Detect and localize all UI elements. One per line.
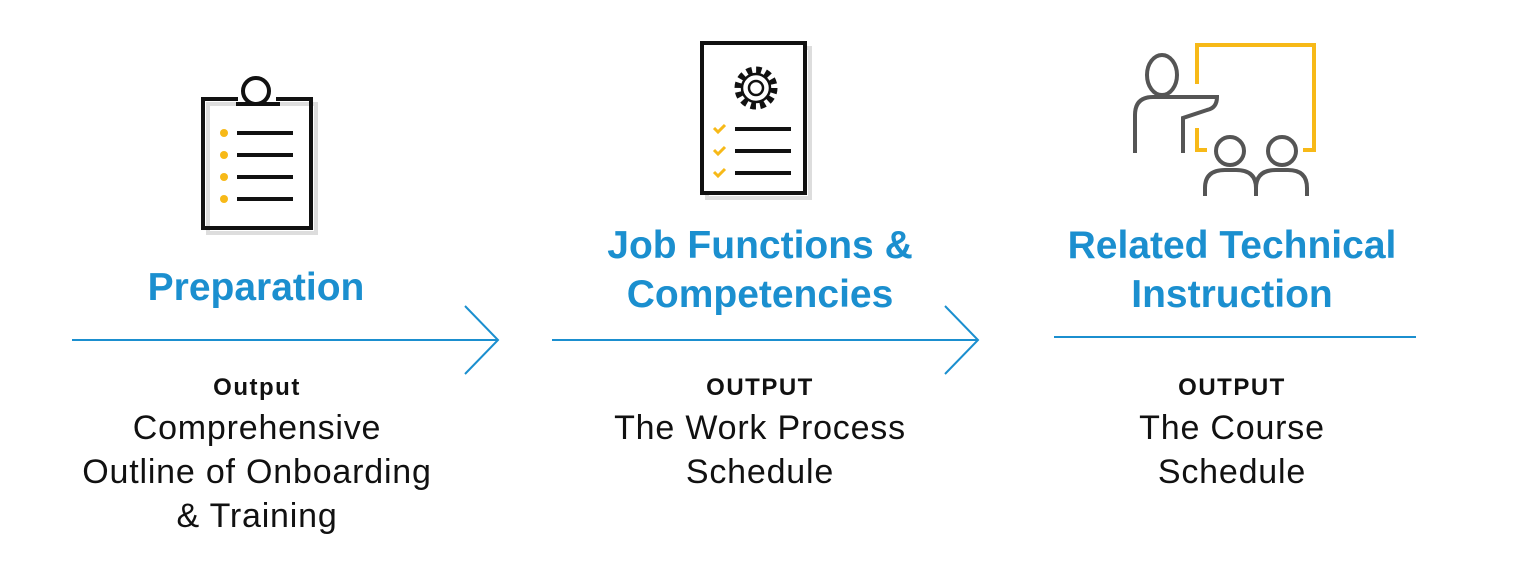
divider 3	[1054, 336, 1416, 338]
icon: clipboard	[203, 78, 316, 233]
title: Related Technical Instruction: Related Technical	[1068, 224, 1396, 267]
output 1: Output	[213, 374, 301, 401]
output 2: OUTPUT	[706, 374, 814, 401]
output 2	[614, 374, 906, 491]
title: Preparation: Preparation	[148, 266, 364, 309]
output 1: & Training	[176, 497, 338, 535]
output 3: OUTPUT	[1178, 374, 1286, 401]
title: Job Functions & Competencies: Competencies	[627, 273, 893, 316]
output 3: The Course	[1139, 409, 1325, 447]
icon: teacher with students	[1135, 45, 1314, 196]
icon: document with gear	[702, 43, 810, 198]
title: Related Technical Instruction: Instruction	[1131, 273, 1333, 316]
arrow 2	[552, 306, 978, 374]
output 2: The Work Process	[614, 409, 906, 447]
output 1	[82, 374, 432, 535]
title: Job Functions & Competencies: Job Functions &	[607, 224, 913, 267]
output 2: Schedule	[686, 453, 834, 491]
output 1: Outline of Onboarding	[82, 453, 432, 491]
output 3	[1139, 374, 1325, 491]
output 3: Schedule	[1158, 453, 1306, 491]
arrow 1	[72, 306, 498, 374]
output 1: Comprehensive	[133, 409, 381, 447]
